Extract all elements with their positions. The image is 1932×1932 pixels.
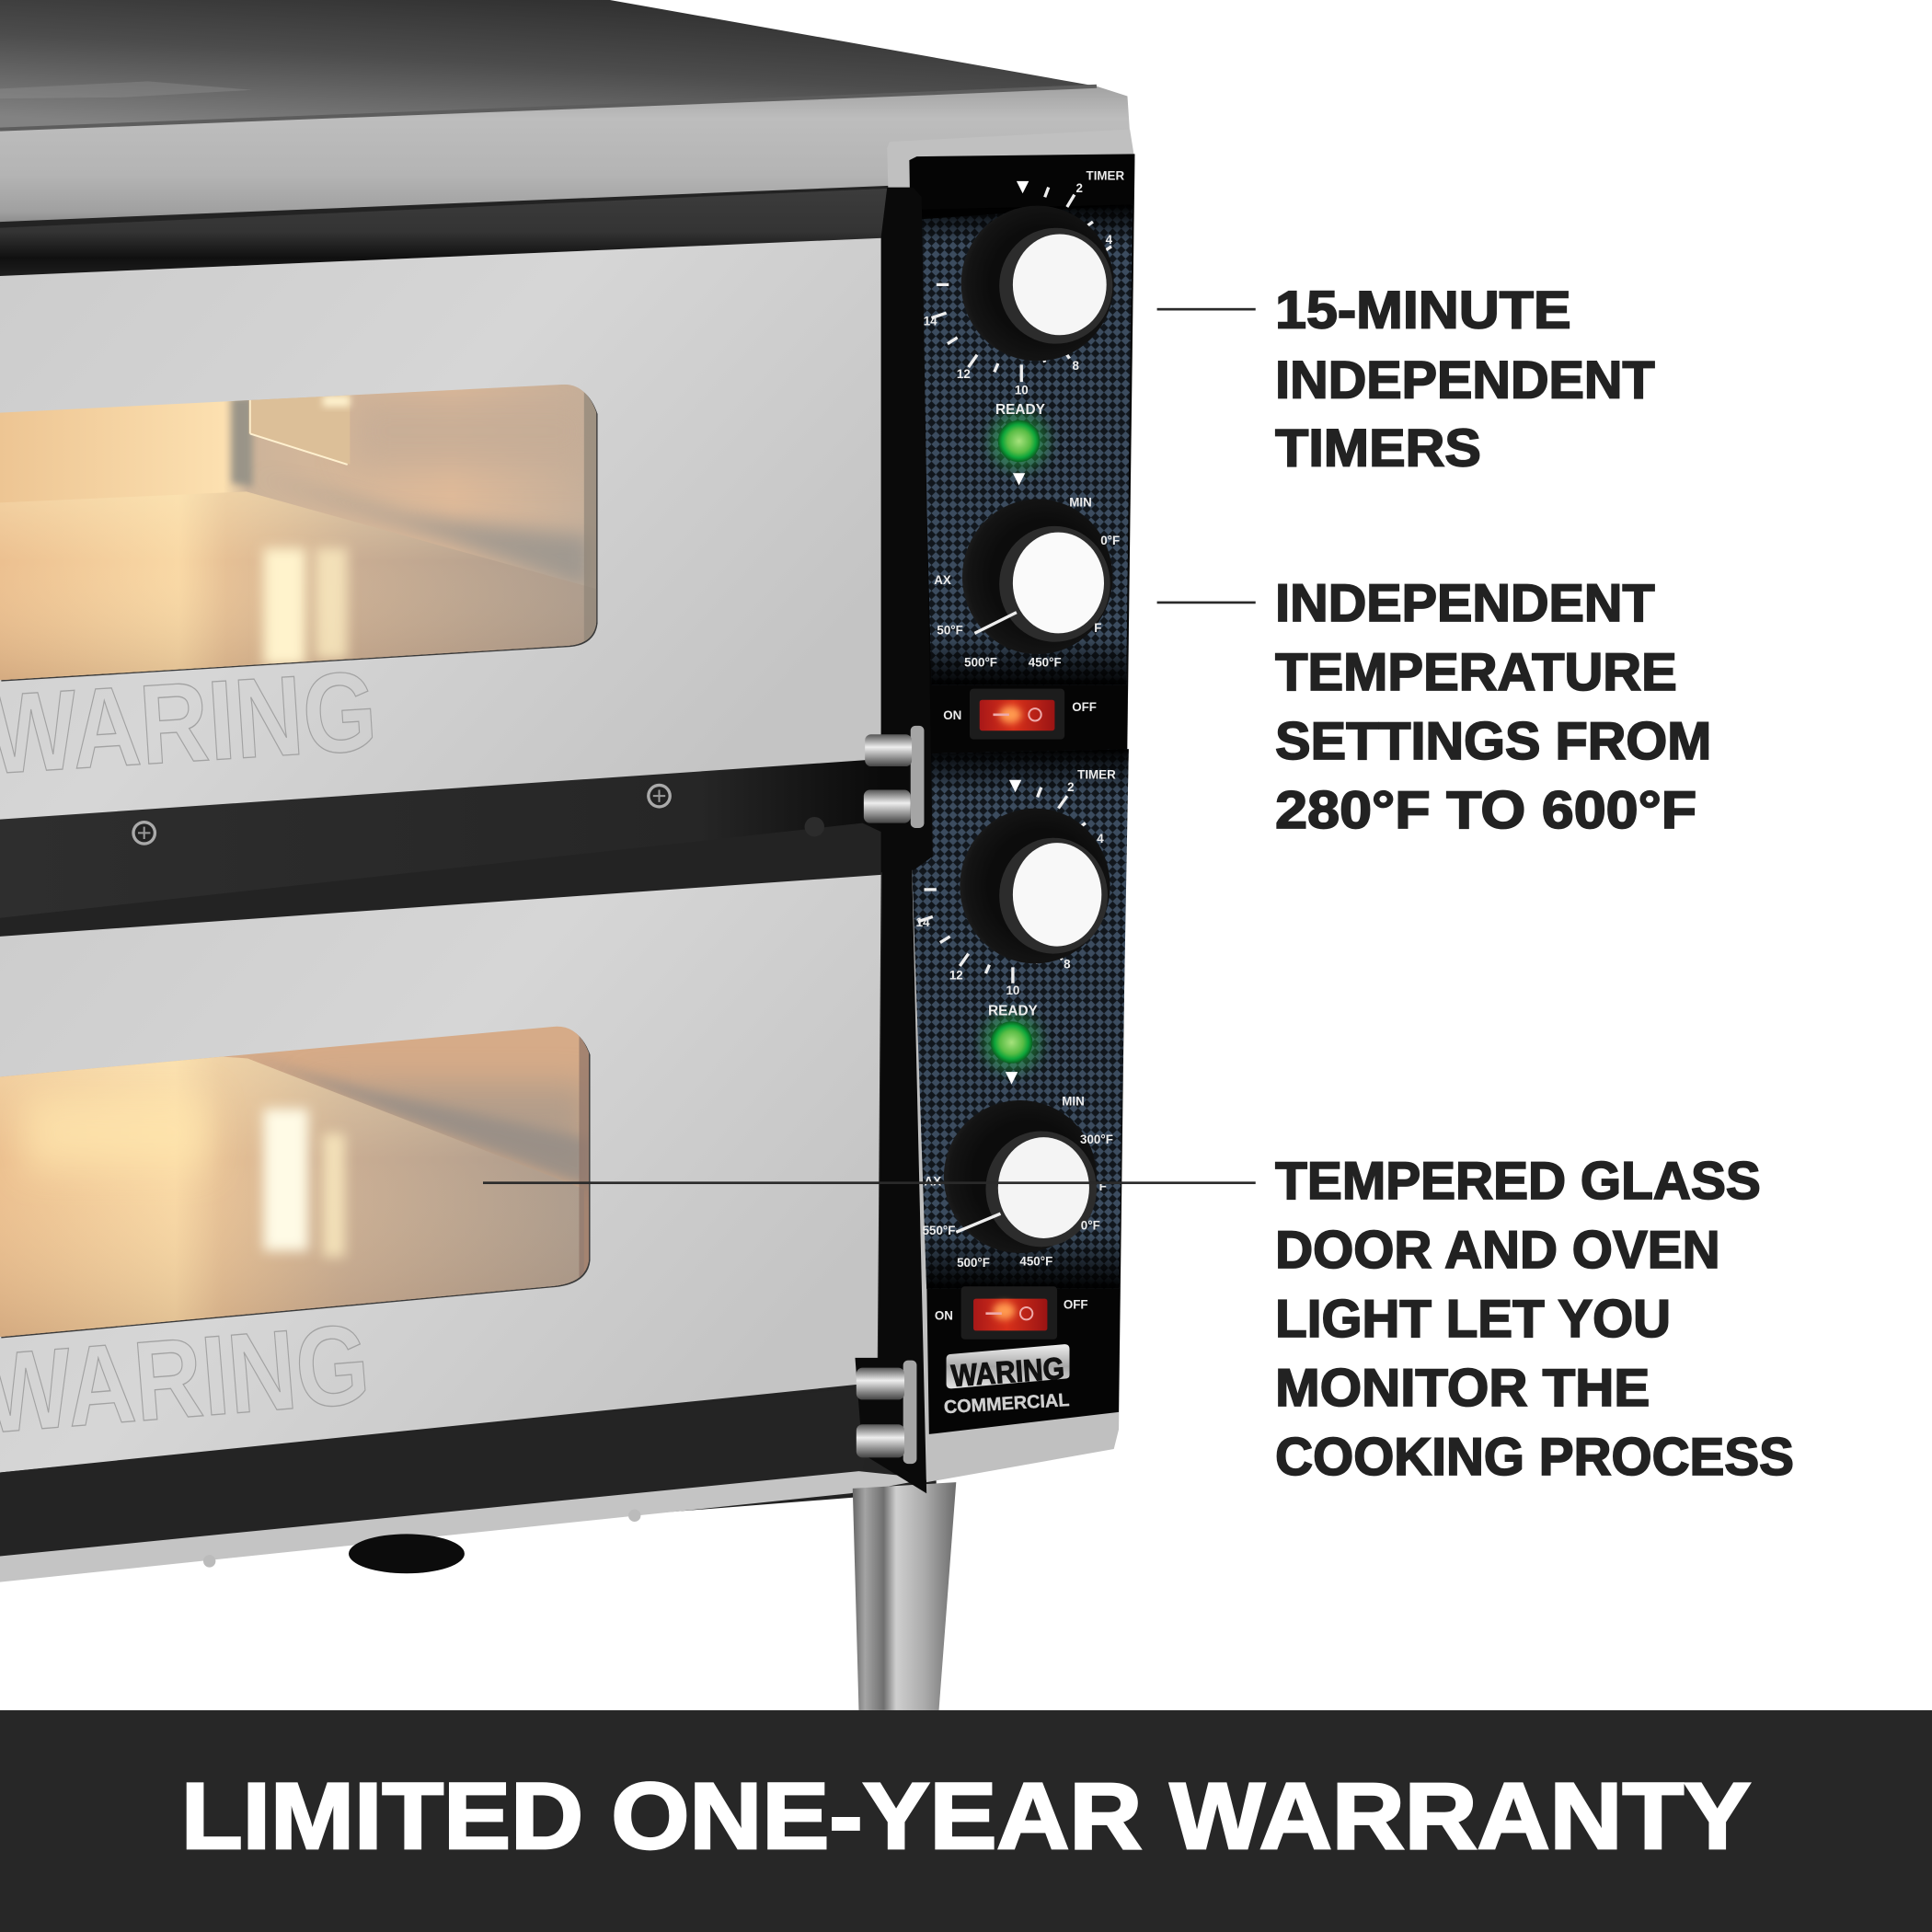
triangle pointer	[1009, 780, 1021, 792]
control panel frame	[887, 130, 1134, 1482]
oven upper door	[0, 188, 933, 918]
callout: temperature	[1157, 574, 1711, 840]
scale labels: 0°F	[1100, 534, 1120, 547]
knob collar	[999, 838, 1108, 954]
lower ready light	[982, 1004, 1041, 1085]
upper temperature dial	[934, 495, 1120, 670]
oven front body	[0, 185, 937, 1565]
scale labels: 550°F	[923, 1224, 955, 1237]
scale labels: F	[1099, 1179, 1107, 1193]
scale labels: F	[1094, 621, 1101, 635]
scale labels: 14	[924, 315, 937, 328]
lower power switch: OFF	[1064, 1297, 1088, 1311]
knob cap	[1013, 234, 1107, 335]
scale labels: 300°F	[1080, 1133, 1113, 1146]
scale labels: 8	[1072, 359, 1079, 373]
callout text	[1275, 574, 1711, 840]
upper door black frame	[0, 188, 933, 918]
upper door glass window	[0, 370, 604, 690]
scale labels: TIMER	[1077, 767, 1116, 781]
scale labels: 2	[1067, 780, 1075, 794]
scale labels: 0°F	[1081, 1219, 1100, 1233]
callout text	[1275, 1152, 1794, 1487]
warranty banner	[0, 1710, 1932, 1932]
scale labels: MIN	[1062, 1094, 1085, 1108]
knob collar	[999, 526, 1110, 642]
upper door steel face	[0, 237, 887, 820]
upper power switch: ON	[943, 708, 961, 722]
scale labels: 500°F	[957, 1256, 990, 1270]
bottom black strip	[0, 1386, 878, 1557]
upper ready light: READY	[995, 402, 1046, 418]
upper door frame top	[0, 188, 912, 276]
leader line	[1157, 308, 1256, 311]
triangle pointer	[1017, 181, 1029, 193]
scale labels: TIMER	[1087, 169, 1124, 183]
callout text: TEMPERED GLASS	[1275, 1152, 1761, 1211]
knob cap	[998, 1137, 1089, 1238]
knob	[960, 809, 1110, 963]
leader line	[1157, 602, 1256, 604]
lower door side flange	[855, 863, 926, 1493]
scale labels: 4	[1106, 233, 1113, 247]
knob	[944, 1100, 1097, 1253]
upper carbon panel	[919, 204, 1133, 685]
scale labels	[923, 1094, 1113, 1270]
callout text: LIGHT LET YOU	[1275, 1290, 1671, 1349]
lower door steel face	[0, 875, 881, 1472]
callout text: SETTINGS FROM	[1275, 712, 1711, 771]
callout: timers	[1157, 281, 1655, 477]
scale labels	[924, 169, 1124, 397]
scale labels: AX	[934, 573, 951, 587]
callout text: 280°F TO 600°F	[1275, 781, 1696, 840]
scale labels	[916, 767, 1116, 997]
callout text: TIMERS	[1275, 419, 1481, 477]
upper power switch: OFF	[1072, 700, 1097, 714]
upper timer dial	[924, 169, 1124, 397]
bottom stainless lip	[0, 1471, 930, 1582]
lower temperature dial	[923, 1094, 1113, 1270]
scale labels: 8	[1064, 958, 1071, 972]
banner text: LIMITED ONE-YEAR WARRANTY	[181, 1764, 1751, 1869]
callout: glass door	[483, 1152, 1794, 1487]
Waring Commercial badge: WARING	[950, 1351, 1065, 1394]
callout text: 15-MINUTE	[1275, 281, 1571, 339]
lower ready light: READY	[988, 1004, 1039, 1019]
scale labels: 12	[957, 367, 971, 381]
knob collar	[999, 228, 1112, 344]
knob	[961, 206, 1114, 361]
oven lower door	[0, 875, 881, 1472]
scale labels: 50°F	[937, 624, 963, 638]
knob	[962, 499, 1112, 654]
scale labels: 2	[1075, 181, 1083, 195]
knob collar	[985, 1131, 1097, 1247]
lower power switch: ON	[935, 1308, 953, 1322]
scale labels: 450°F	[1029, 656, 1062, 670]
callout text: TEMPERATURE	[1275, 643, 1677, 702]
Waring Commercial badge	[943, 1344, 1070, 1418]
lower power switch	[935, 1286, 1088, 1340]
pointer line	[956, 1213, 1001, 1232]
oven top surface	[0, 0, 1097, 133]
upper ready light	[989, 402, 1049, 486]
callout text: MONITOR THE	[1275, 1359, 1650, 1418]
lower timer dial	[916, 767, 1116, 997]
callout text	[1275, 281, 1655, 477]
scale labels: MIN	[1069, 495, 1092, 509]
callout text: COOKING PROCESS	[1275, 1428, 1794, 1487]
lower door glass window	[0, 1017, 604, 1350]
upper door side flange	[881, 188, 933, 872]
upper hinges	[864, 726, 924, 828]
pointer line	[974, 613, 1017, 633]
scale labels: AX	[925, 1174, 941, 1188]
scale labels: 450°F	[1019, 1254, 1052, 1268]
callout text: DOOR AND OVEN	[1275, 1221, 1720, 1280]
knob cap	[1013, 843, 1101, 947]
control panel	[909, 154, 1134, 1434]
top edge ridge	[0, 86, 1097, 130]
scale labels: 12	[949, 969, 963, 983]
knob cap	[1013, 533, 1104, 633]
scale labels: 10	[1015, 384, 1029, 397]
scale labels: 500°F	[964, 656, 997, 670]
rubber foot	[349, 1534, 465, 1573]
stamped marking on top surface	[0, 81, 253, 98]
steel oven leg	[853, 1482, 956, 1710]
callout text: INDEPENDENT	[1275, 574, 1655, 633]
Waring Commercial badge: COMMERCIAL	[943, 1390, 1070, 1418]
scale labels: 14	[916, 915, 930, 929]
small underside screws	[203, 1510, 640, 1568]
stainless top band	[0, 86, 1130, 234]
leader line	[483, 1181, 1256, 1184]
scale labels	[934, 495, 1120, 670]
tick marks	[918, 788, 1094, 983]
scale labels: 10	[1006, 983, 1019, 997]
lower carbon panel	[912, 749, 1129, 1289]
lower hinges	[857, 1361, 916, 1464]
tick marks	[931, 188, 1111, 382]
callout text: INDEPENDENT	[1275, 351, 1655, 410]
scale labels: 4	[1097, 832, 1104, 845]
divider strip screws	[132, 784, 824, 845]
upper power switch	[943, 689, 1097, 740]
